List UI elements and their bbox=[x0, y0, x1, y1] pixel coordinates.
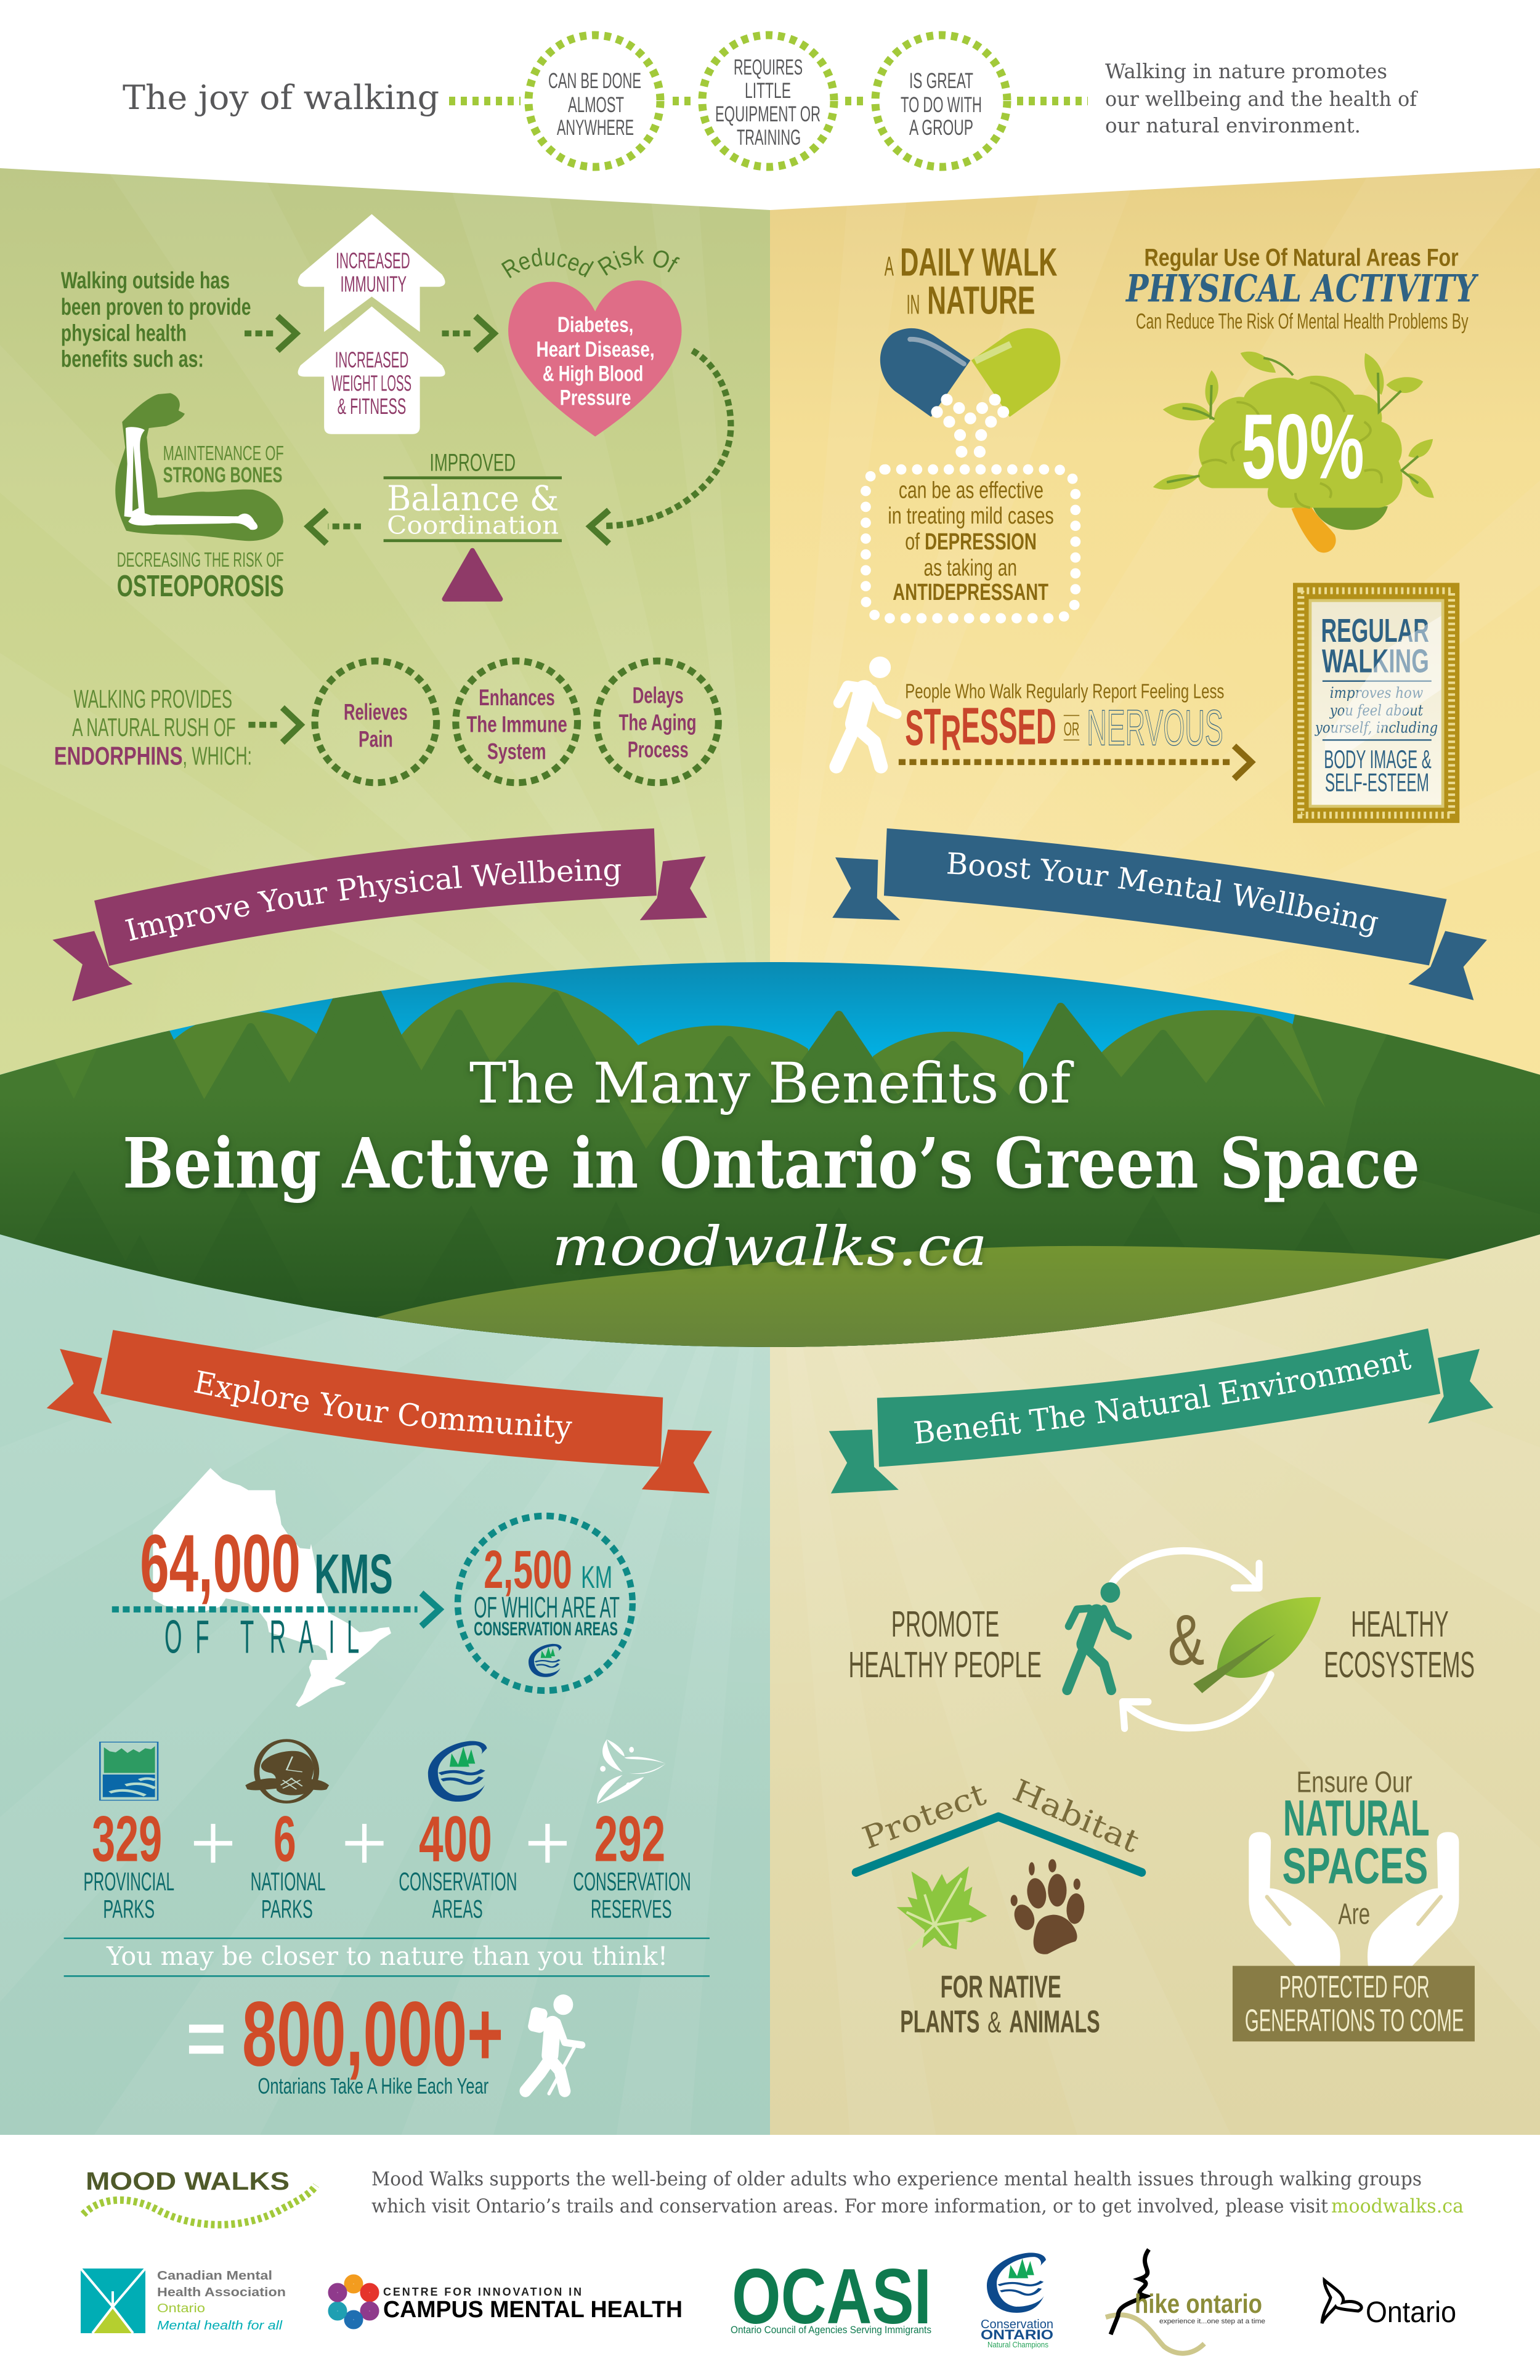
icon: heart with risks bbox=[508, 280, 682, 437]
heading: reduced risk of: Risk Of bbox=[598, 246, 680, 276]
icon: balance triangle bbox=[444, 551, 500, 599]
forest band with title bbox=[0, 962, 1540, 1347]
logo: mood walks bbox=[83, 2167, 316, 2225]
logo: Ontario: Ontario bbox=[1366, 2296, 1456, 2329]
circle: can be done almost anywhere: ALMOST bbox=[568, 93, 624, 117]
stat: 64,000 kms of trail: OF TRAIL bbox=[164, 1610, 359, 1663]
circle: requires little equipment or training: LITTLE bbox=[745, 79, 791, 103]
heading: reduced risk of: Reduced bbox=[501, 248, 594, 278]
stat: 800,000+ bbox=[189, 1983, 503, 2099]
banner: boost your mental wellbeing: Boost Your Mental Wellbeing bbox=[947, 852, 1379, 937]
intro text bbox=[1105, 59, 1419, 137]
text: strong bones and osteoporosis: DECREASING THE RISK OF bbox=[117, 549, 284, 572]
text: for native plants and animals: & bbox=[987, 2006, 1001, 2039]
callout: regular walking framed picture bbox=[1293, 583, 1459, 823]
circle: 2,500 km at conservation areas: CONSERVATION AREAS bbox=[474, 1618, 618, 1640]
text: strong bones and osteoporosis bbox=[117, 442, 284, 603]
callout: dotted frame depression text: can be as effective bbox=[899, 477, 1044, 503]
text: improved balance and coordination: Coordination bbox=[387, 512, 559, 540]
icon: arrow increased weight loss and fitness: & FITNESS bbox=[338, 394, 406, 419]
heading: protect habitat bbox=[861, 1779, 1138, 1852]
arrow: to endorphin circles bbox=[248, 708, 301, 742]
text: endorphins: , WHICH: bbox=[183, 741, 252, 770]
heading: protect habitat: Habitat bbox=[1013, 1779, 1138, 1852]
text: walking outside: been proven to provide bbox=[61, 294, 251, 320]
stat: 64,000 kms of trail bbox=[112, 1518, 439, 1663]
icon: paw print bbox=[1010, 1859, 1085, 1954]
stat: 64,000 kms of trail: KMS bbox=[314, 1542, 393, 1605]
circle: 2,500 km at conservation areas bbox=[458, 1516, 633, 1691]
intro text: our natural environment. bbox=[1105, 113, 1361, 137]
icon: arrow increased weight loss and fitness: INCREASED bbox=[335, 347, 408, 372]
circle: delays the aging process: Process bbox=[628, 737, 689, 762]
stat: national parks: 6 bbox=[274, 1803, 296, 1875]
text: improved balance and coordination: IMPROVED bbox=[430, 450, 516, 477]
callout: regular walking framed picture: improves how bbox=[1330, 684, 1423, 702]
text: for native plants and animals: ANIMALS bbox=[1009, 2004, 1100, 2039]
dotted connectors bbox=[449, 97, 1088, 105]
heading: a daily walk in nature: DAILY WALK bbox=[900, 240, 1057, 284]
icon: map of Ontario bbox=[153, 1468, 391, 1707]
stat: conservation reserves: 292 bbox=[594, 1803, 665, 1875]
logo: Centre for Innovation in Campus Mental Health: CAMPUS MENTAL HEALTH bbox=[383, 2297, 683, 2323]
circle: delays the aging process: Delays bbox=[633, 683, 684, 708]
intro text: Walking in nature promotes bbox=[1105, 59, 1387, 83]
circle: enhances the immune system: System bbox=[487, 739, 546, 764]
icon: plus bbox=[194, 1824, 567, 1863]
stat: 800,000+: Ontarians Take A Hike Each Year bbox=[258, 2073, 488, 2099]
logo: Hike Ontario: hike ontario bbox=[1135, 2289, 1262, 2319]
icon: arrow increased immunity bbox=[298, 214, 445, 332]
circle: requires little equipment or training: EQUIPMENT OR bbox=[715, 102, 821, 126]
circle: requires little equipment or training: REQUIRES bbox=[734, 55, 803, 79]
logo: Conservation Ontario bbox=[981, 2252, 1053, 2349]
banner: benefit the natural environment bbox=[829, 1328, 1493, 1494]
text: ensure our natural spaces are bbox=[1282, 1765, 1430, 1930]
text: about mood walks bbox=[371, 2168, 1464, 2217]
banner: improve your physical wellbeing bbox=[52, 828, 707, 1002]
text: promote healthy people: HEALTHY PEOPLE bbox=[849, 1645, 1042, 1685]
text: stressed or nervous: People Who Walk Regularly Report Feeling Less bbox=[905, 681, 1224, 703]
logo: Conservation Ontario: ONTARIO bbox=[981, 2327, 1053, 2342]
callout: regular walking framed picture: yourself, including bbox=[1315, 719, 1438, 736]
icon: heart with risks: Heart Disease, bbox=[537, 338, 655, 362]
intro text: our wellbeing and the health of bbox=[1105, 87, 1419, 111]
text: improved balance and coordination bbox=[384, 450, 562, 541]
icon: cycle arrows bbox=[1112, 1551, 1271, 1728]
circle: 2,500 km at conservation areas: OF WHICH ARE AT bbox=[474, 1590, 620, 1624]
text: stressed or nervous: OR bbox=[1064, 719, 1079, 740]
stat: national parks: PARKS bbox=[261, 1895, 313, 1924]
stat: conservation reserves bbox=[573, 1803, 691, 1924]
website url: moodwalks.ca bbox=[552, 1215, 987, 1278]
text: about mood walks: which visit Ontario’s trails and conservation areas. For more information, or to get involved, please visit bbox=[371, 2195, 1329, 2217]
logo: Canadian Mental Health Association bbox=[81, 2269, 286, 2333]
text: ensure our natural spaces are: SPACES bbox=[1282, 1837, 1428, 1895]
text: ampersand: & bbox=[1168, 1600, 1205, 1680]
banner: explore your community bbox=[47, 1330, 712, 1494]
icon: arm with bones bbox=[115, 393, 283, 541]
logo: mood walks: MOOD WALKS bbox=[86, 2167, 290, 2195]
text: strong bones and osteoporosis: MAINTENANCE OF bbox=[163, 442, 284, 465]
panel: benefit the natural environment bbox=[829, 1328, 1493, 2041]
banner: improve your physical wellbeing: Improve Your Physical Wellbeing bbox=[124, 859, 621, 941]
logo: Canadian Mental Health Association: Ontario bbox=[157, 2302, 205, 2315]
circle: enhances the immune system: The Immune bbox=[466, 712, 567, 737]
text: ensure our natural spaces are: Ensure Our bbox=[1297, 1765, 1412, 1799]
icon: national parks beaver bbox=[245, 1741, 329, 1802]
icon: arrow increased immunity: IMMUNITY bbox=[340, 272, 407, 297]
circle: enhances the immune system bbox=[456, 661, 578, 783]
circle: delays the aging process: The Aging bbox=[618, 710, 696, 735]
arrow: dotted to framed picture bbox=[899, 746, 1251, 779]
logo: Hike Ontario bbox=[1106, 2249, 1265, 2354]
panel: boost your mental wellbeing bbox=[829, 240, 1487, 1000]
text: for native plants and animals: FOR NATIVE bbox=[941, 1969, 1061, 2004]
callout: dotted frame depression text: of bbox=[905, 528, 920, 555]
logo: OCASI: Ontario Council of Agencies Serving Immigrants bbox=[731, 2324, 931, 2336]
callout: regular walking framed picture: BODY IMAGE & bbox=[1324, 745, 1432, 774]
callout: regular walking framed picture: SELF-ESTEEM bbox=[1325, 767, 1429, 796]
stat: conservation areas: CONSERVATION bbox=[399, 1867, 517, 1896]
icon: cupped hands bbox=[1249, 1832, 1459, 1967]
stat: provincial parks: PARKS bbox=[103, 1895, 155, 1924]
text: about mood walks: Mood Walks supports the well-being of older adults who experience mental health issues through walking groups bbox=[371, 2168, 1422, 2190]
circle: can be done almost anywhere: CAN BE DONE bbox=[548, 69, 641, 93]
heading: a daily walk in nature: NATURE bbox=[927, 278, 1035, 322]
text: strong bones and osteoporosis: STRONG BONES bbox=[163, 463, 282, 487]
text: about mood walks: moodwalks.ca bbox=[1331, 2195, 1464, 2217]
banner: benefit the natural environment: Benefit The Natural Environment bbox=[914, 1349, 1412, 1444]
logo: Canadian Mental Health Association: Canadian Mental bbox=[157, 2269, 272, 2283]
icon: white walker bbox=[837, 657, 897, 766]
circle: is great to do with a group: TO DO WITH bbox=[901, 93, 982, 117]
logo: Centre for Innovation in Campus Mental Health: CENTRE FOR INNOVATION IN bbox=[383, 2286, 582, 2298]
callout: regular walking framed picture: you feel about bbox=[1329, 702, 1424, 719]
arrow: to bones bbox=[309, 510, 361, 544]
icon: arrow increased weight loss and fitness: WEIGHT LOSS bbox=[331, 371, 411, 396]
text: promote healthy people bbox=[849, 1604, 1042, 1685]
logo: Canadian Mental Health Association: Mental health for all bbox=[157, 2319, 283, 2333]
text: walking outside: benefits such as: bbox=[61, 346, 204, 373]
text: endorphins: A NATURAL RUSH OF bbox=[72, 713, 236, 742]
text: endorphins: ENDORPHINS bbox=[54, 741, 183, 770]
logo: Canadian Mental Health Association: Health Association bbox=[157, 2286, 286, 2299]
callout: protected for generations to come bbox=[1233, 1966, 1475, 2041]
callout: dotted frame depression text: as taking an bbox=[924, 554, 1017, 581]
text: for native plants and animals bbox=[900, 1969, 1100, 2039]
callout: dotted frame depression text bbox=[865, 469, 1076, 618]
circle: relieves pain: Relieves bbox=[344, 700, 408, 725]
stat: conservation reserves: RESERVES bbox=[591, 1895, 672, 1924]
footer bbox=[81, 2167, 1464, 2354]
top strip: the joy of walking bbox=[123, 35, 1419, 167]
icon: arrow increased weight loss and fitness bbox=[298, 306, 445, 434]
heading: a daily walk in nature: A bbox=[885, 251, 894, 281]
text: endorphins: WALKING PROVIDES bbox=[74, 684, 232, 713]
icon: conservation areas logo bbox=[428, 1741, 487, 1802]
circle: requires little equipment or training bbox=[702, 35, 834, 167]
circle: is great to do with a group: A GROUP bbox=[909, 116, 973, 140]
stat: 64,000 kms of trail: 64,000 bbox=[140, 1518, 301, 1609]
circle: can be done almost anywhere bbox=[529, 35, 660, 167]
stat: conservation reserves: CONSERVATION bbox=[573, 1867, 691, 1896]
panel: improve your physical wellbeing bbox=[52, 214, 734, 1002]
text: promote healthy people: PROMOTE bbox=[891, 1604, 999, 1645]
callout: protected for generations to come: PROTECTED FOR bbox=[1279, 1969, 1430, 2004]
forest landscape bbox=[0, 962, 1540, 1347]
circle: requires little equipment or training: TRAINING bbox=[737, 126, 801, 150]
icon: maple leaf bbox=[897, 1866, 987, 1951]
text: stressed or nervous: STRESSED bbox=[905, 697, 1056, 761]
text: walking outside: physical health bbox=[61, 320, 187, 346]
logo: Conservation Ontario: Natural Champions bbox=[987, 2340, 1048, 2349]
icon: arrow increased immunity: INCREASED bbox=[336, 248, 410, 273]
heading: a daily walk in nature: IN bbox=[907, 289, 920, 320]
icon: brain with leaves, 50 percent: 50% bbox=[1241, 395, 1364, 498]
heading: protect habitat: Protect bbox=[861, 1786, 987, 1849]
panel: explore your community bbox=[47, 1330, 712, 2099]
circle: can be done almost anywhere: ANYWHERE bbox=[557, 116, 634, 140]
stat: 800,000+: 800,000+ bbox=[242, 1983, 503, 2086]
text: endorphins bbox=[54, 684, 252, 770]
stat: conservation areas bbox=[399, 1803, 517, 1924]
title line 1: The Many Benefits of bbox=[469, 1051, 1074, 1116]
text: strong bones and osteoporosis: OSTEOPOROSIS bbox=[117, 569, 284, 603]
text: healthy ecosystems: HEALTHY bbox=[1351, 1604, 1449, 1645]
text: for native plants and animals: PLANTS bbox=[900, 2004, 979, 2039]
callout: regular walking framed picture: WALKING bbox=[1322, 642, 1429, 679]
icon: heart with risks: & High Blood bbox=[543, 362, 643, 386]
stat: provincial parks: PROVINCIAL bbox=[84, 1867, 174, 1896]
heading: the joy of walking: The joy of walking bbox=[123, 78, 439, 117]
arrow: to house arrows bbox=[245, 316, 296, 350]
stat: national parks bbox=[251, 1803, 326, 1924]
stat: provincial parks bbox=[84, 1803, 174, 1924]
logo: OCASI: OCASI bbox=[732, 2252, 931, 2340]
callout: dotted frame depression text: in treating mild cases bbox=[888, 503, 1054, 529]
heading: reduced risk of bbox=[501, 246, 680, 278]
text: walking outside: Walking outside has bbox=[61, 267, 230, 294]
text: stressed or nervous bbox=[905, 681, 1224, 761]
icon: conservation reserves trillium bbox=[597, 1739, 666, 1803]
circle: relieves pain: Pain bbox=[359, 727, 393, 752]
forest: tree line bbox=[0, 990, 1540, 1347]
callout: closer to nature: You may be closer to nature than you think! bbox=[106, 1941, 668, 1971]
text: stressed or nervous: NERVOUS bbox=[1087, 700, 1223, 756]
logo: Hike Ontario: experience it...one step at a time bbox=[1159, 2318, 1265, 2325]
callout: dotted frame depression text: ANTIDEPRESSANT bbox=[893, 579, 1048, 605]
arrow: curved dotted from heart to balance bbox=[590, 350, 731, 544]
circle: is great to do with a group: IS GREAT bbox=[909, 69, 973, 93]
circle: relieves pain bbox=[315, 661, 437, 783]
stat: conservation areas: 400 bbox=[419, 1803, 492, 1875]
text: improved balance and coordination: Balance & bbox=[387, 479, 559, 519]
circle: 2,500 km at conservation areas: 2,500 bbox=[484, 1540, 572, 1600]
stat: provincial parks: 329 bbox=[92, 1803, 162, 1875]
stat: national parks: NATIONAL bbox=[251, 1867, 326, 1896]
logo: Conservation Ontario: Conservation bbox=[981, 2318, 1053, 2331]
heading: physical activity stat: Regular Use Of Natural Areas For bbox=[1144, 244, 1459, 271]
circle: is great to do with a group bbox=[875, 35, 1007, 167]
circle: enhances the immune system: Enhances bbox=[479, 685, 555, 710]
icon: green leaf bbox=[1193, 1597, 1321, 1693]
text: healthy ecosystems bbox=[1324, 1604, 1475, 1685]
icon: capsule pill bbox=[880, 328, 1060, 458]
icon: hiker bbox=[525, 1994, 582, 2094]
callout: regular walking framed picture: REGULAR bbox=[1321, 612, 1429, 649]
icon: provincial parks bbox=[100, 1742, 158, 1800]
heading: a daily walk in nature bbox=[885, 240, 1057, 322]
icon: heart with risks: Diabetes, bbox=[557, 313, 633, 337]
icon: heart with risks: Pressure bbox=[560, 386, 631, 410]
arrow: to heart bbox=[442, 316, 494, 350]
text: walking outside bbox=[61, 267, 251, 373]
icon: roof bbox=[856, 1816, 1141, 1872]
banner: explore your community: Explore Your Community bbox=[194, 1370, 572, 1444]
heading: physical activity stat bbox=[1125, 244, 1479, 333]
logo: Centre for Innovation in Campus Mental Health bbox=[333, 2279, 683, 2325]
icon: teal walker bbox=[1067, 1582, 1129, 1690]
stat: conservation areas: AREAS bbox=[432, 1895, 483, 1924]
circle: delays the aging process bbox=[597, 661, 718, 783]
banner: boost your mental wellbeing bbox=[832, 828, 1487, 1000]
text: ensure our natural spaces are: NATURAL bbox=[1283, 1790, 1430, 1847]
circle: 2,500 km at conservation areas: KM bbox=[581, 1559, 612, 1595]
callout: dotted frame depression text: DEPRESSION bbox=[925, 528, 1037, 555]
icon: brain with leaves, 50 percent bbox=[1153, 352, 1434, 552]
text: ensure our natural spaces are: Are bbox=[1338, 1897, 1370, 1930]
logo: Ontario bbox=[1322, 2280, 1456, 2329]
